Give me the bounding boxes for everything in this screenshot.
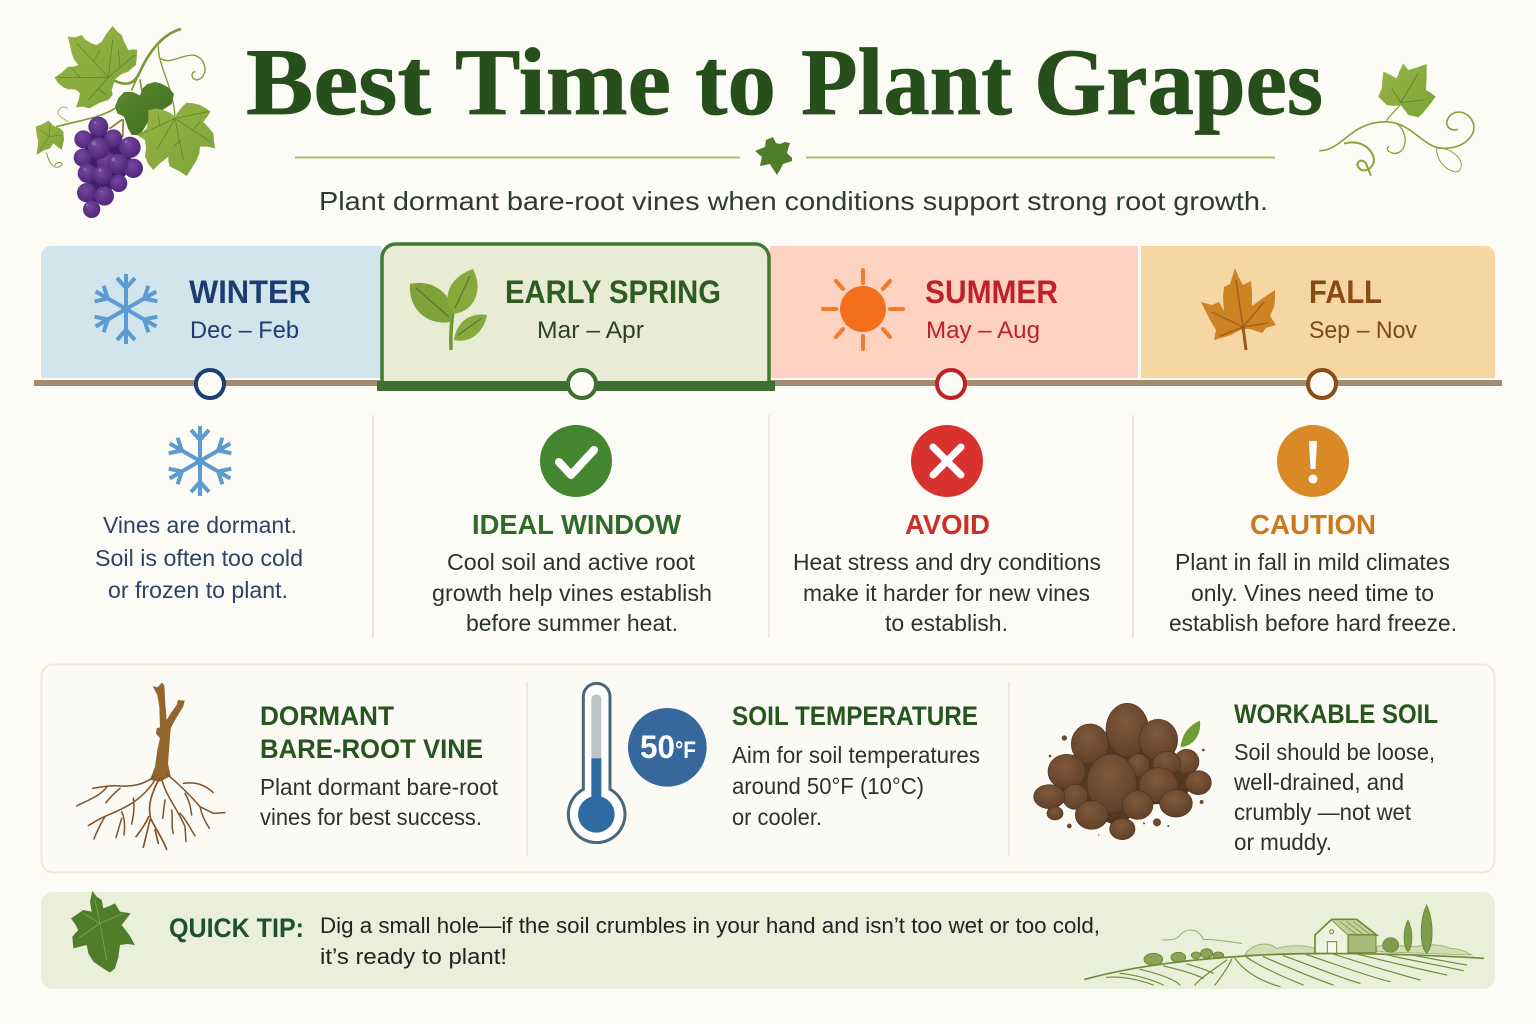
winter heading: WINTER xyxy=(189,274,311,310)
vine stems xyxy=(47,29,205,167)
title: Plant xyxy=(801,29,1012,135)
fall months: Sep – Nov xyxy=(1309,317,1417,344)
avoid description: to establish. xyxy=(885,610,1008,636)
icon: sun xyxy=(823,270,903,349)
marker: fall xyxy=(1308,370,1336,398)
field furrows xyxy=(1107,954,1467,987)
thermometer empty column xyxy=(591,694,601,758)
soil pile backing xyxy=(1049,730,1198,829)
flourish tendrils xyxy=(1320,105,1474,175)
winter description: Vines are dormant. xyxy=(103,512,297,538)
band: summer xyxy=(770,246,1138,378)
title: to xyxy=(695,29,776,135)
winter description: or frozen to plant. xyxy=(108,577,288,603)
caution description: only. Vines need time to xyxy=(1191,580,1434,606)
title divider xyxy=(295,137,1275,175)
band: winter xyxy=(41,246,382,378)
soil leaf xyxy=(1181,721,1200,747)
column: caution xyxy=(1169,425,1457,636)
panel: season timeline xyxy=(34,244,1502,398)
icon: soil pile xyxy=(1034,703,1211,840)
soil crumbs xyxy=(1049,735,1205,836)
soil temperature heading: SOIL TEMPERATURE xyxy=(732,701,978,731)
workable soil description: well-drained, and xyxy=(1233,769,1404,795)
workable soil description: crumbly —not wet xyxy=(1234,799,1412,825)
icon: x badge xyxy=(911,425,983,497)
winter months: Dec – Feb xyxy=(190,317,299,344)
icon: green sprig xyxy=(410,269,487,350)
dormant vine heading: BARE-ROOT VINE xyxy=(260,734,483,764)
early spring months: Mar – Apr xyxy=(537,317,644,344)
band: fall xyxy=(1141,246,1495,378)
caution heading: CAUTION xyxy=(1250,509,1376,540)
quick tip text: Dig a small hole—if the soil crumbles in your hand and isn’t too wet or too cold, xyxy=(320,913,1100,938)
winter description xyxy=(95,512,303,603)
quick tip text: it’s ready to plant! xyxy=(320,944,507,969)
leaf: small left xyxy=(36,121,64,155)
illustration: farm landscape xyxy=(1085,905,1483,987)
icon: exclamation badge xyxy=(1277,425,1349,497)
grape cluster backing xyxy=(83,127,132,208)
icon: thermometer with 50F badge xyxy=(568,683,707,843)
icon: bare-root vine xyxy=(77,683,225,849)
caution description: establish before hard freeze. xyxy=(1169,610,1457,636)
50F label: °F xyxy=(675,737,696,764)
ideal window description xyxy=(432,549,712,636)
dormant vine heading: DORMANT xyxy=(260,701,394,731)
quick tip label: QUICK TIP: xyxy=(169,913,304,943)
farmhouse xyxy=(1315,919,1377,953)
caution description: Plant in fall in mild climates xyxy=(1175,549,1450,575)
dormant vine description: Plant dormant bare-root xyxy=(260,774,499,800)
cypress trees xyxy=(1383,905,1432,953)
fall heading: FALL xyxy=(1309,274,1382,310)
distant shrubs xyxy=(1245,944,1315,955)
workable soil description: Soil should be loose, xyxy=(1234,739,1435,765)
vine trunk xyxy=(150,683,185,782)
icon: small divider leaf xyxy=(755,137,792,175)
icon: grape cluster with leaves xyxy=(36,26,215,218)
thermometer body xyxy=(568,683,625,843)
subtitle: Plant dormant bare-root vines when conditions support strong root growth. xyxy=(319,186,1268,216)
early spring heading: EARLY SPRING xyxy=(505,274,721,310)
grape berries xyxy=(74,117,143,218)
band: early spring highlighted xyxy=(377,244,775,391)
icon: winter snowflake xyxy=(91,274,161,344)
50F badge xyxy=(628,708,707,787)
vine roots xyxy=(77,773,225,849)
thermometer mercury xyxy=(578,758,615,833)
ideal window description: before summer heat. xyxy=(466,610,678,636)
leaf: dark back xyxy=(115,82,174,135)
title: Time xyxy=(455,29,671,135)
soil clumps xyxy=(1034,703,1211,840)
dormant vine description xyxy=(260,774,499,830)
grape highlights xyxy=(84,121,128,206)
summer heading: SUMMER xyxy=(925,274,1058,310)
hill ridge xyxy=(1085,954,1483,979)
soil temperature description: or cooler. xyxy=(732,804,822,830)
flourish leaf xyxy=(1378,63,1436,117)
50F label: 50 xyxy=(640,729,675,765)
caution description xyxy=(1169,549,1457,636)
summer months: May – Aug xyxy=(926,317,1040,344)
panel: planting requirements xyxy=(42,664,1494,872)
marker: early spring xyxy=(568,370,596,398)
timeline rail xyxy=(34,380,1502,386)
winter description: Soil is often too cold xyxy=(95,545,303,571)
column: ideal window xyxy=(432,425,712,636)
title: Grapes xyxy=(1034,29,1323,135)
ideal window description: Cool soil and active root xyxy=(447,549,696,575)
icon: check badge xyxy=(540,425,612,497)
soil temperature description: Aim for soil temperatures xyxy=(732,742,980,768)
workable soil description: or muddy. xyxy=(1234,829,1332,855)
leaf: top left xyxy=(54,26,137,108)
trees left xyxy=(1144,949,1224,965)
icon: snowflake xyxy=(165,426,235,496)
column: avoid xyxy=(793,425,1101,636)
icon: maple leaf xyxy=(1201,268,1276,350)
distant cloud hill xyxy=(1162,930,1242,943)
workable soil heading: WORKABLE SOIL xyxy=(1234,699,1438,729)
dormant vine description: vines for best success. xyxy=(260,804,482,830)
quick tip text xyxy=(320,913,1100,969)
ideal window heading: IDEAL WINDOW xyxy=(472,509,682,540)
marker: summer xyxy=(937,370,965,398)
workable soil description xyxy=(1233,739,1435,855)
avoid heading: AVOID xyxy=(905,509,990,540)
dormant vine heading xyxy=(260,701,483,764)
soil temperature description: around 50°F (10°C) xyxy=(732,773,924,799)
avoid description: Heat stress and dry conditions xyxy=(793,549,1101,575)
ideal window description: growth help vines establish xyxy=(432,580,712,606)
marker: winter xyxy=(196,370,224,398)
panel: quick tip xyxy=(41,891,1495,989)
leaf: right xyxy=(137,103,215,176)
avoid description: make it harder for new vines xyxy=(803,580,1090,606)
icon: quick tip leaf xyxy=(71,891,135,973)
title: Best xyxy=(246,29,431,135)
column: winter status xyxy=(95,426,303,603)
avoid description xyxy=(793,549,1101,636)
soil temperature description xyxy=(732,742,980,830)
icon: vine flourish, top right xyxy=(1320,63,1474,175)
